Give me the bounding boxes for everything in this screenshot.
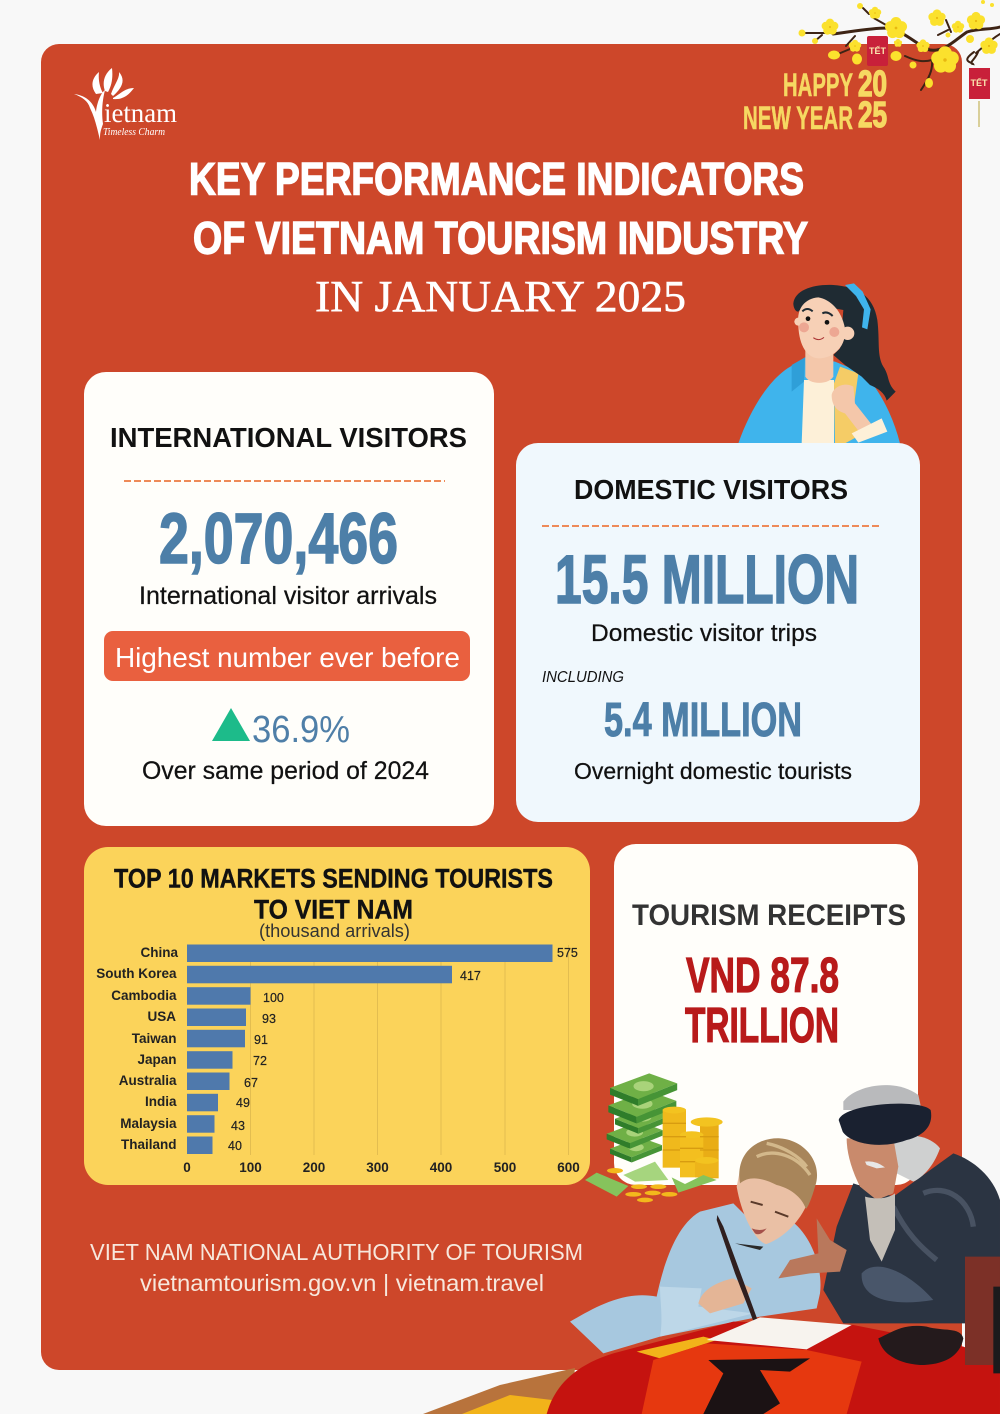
overnight tourists caption: Overnight domestic tourists <box>574 758 852 784</box>
heading: top 10 markets <box>114 864 553 924</box>
bar chart: 40 <box>228 1139 242 1153</box>
heading: international visitors: INTERNATIONAL VISITORS <box>110 422 467 453</box>
bar chart: 600 <box>557 1160 580 1175</box>
receipts figure <box>685 949 839 1053</box>
growth caption: Over same period of 2024 <box>142 757 429 785</box>
bar chart: China <box>140 945 178 960</box>
child <box>570 1138 821 1353</box>
elder <box>823 1085 1000 1323</box>
title: KEY PERFORMANCE INDICATORS <box>189 154 804 204</box>
footer: organisation and websites: VIET NAM NATIONAL AUTHORITY OF TOURISM <box>90 1239 583 1265</box>
bar chart: Taiwan <box>132 1031 176 1046</box>
apricot blossom branch with Tet lanterns <box>798 0 1000 127</box>
heading: top 10 markets: TO VIET NAM <box>254 894 413 924</box>
bar chart: 300 <box>366 1160 389 1175</box>
title <box>189 154 808 321</box>
logo: Vietnam Timeless Charm: ietnam <box>104 98 177 128</box>
bar chart: 500 <box>494 1160 516 1175</box>
badge: highest number ever before <box>104 631 470 681</box>
bar chart: 93 <box>262 1012 276 1026</box>
bar chart: 91 <box>254 1033 268 1047</box>
panel: international visitors <box>84 372 494 826</box>
greeting: Happy New Year 2025: HAPPY <box>783 67 853 103</box>
logo: Vietnam Timeless Charm: Timeless Charm <box>103 127 165 138</box>
bar chart: 575 <box>557 946 578 960</box>
badge: highest number ever before: Highest number ever before <box>115 642 460 673</box>
bar chart: 200 <box>303 1160 325 1175</box>
illustration: stacks of money and coins <box>585 1073 723 1202</box>
bar chart: Thailand <box>121 1137 176 1152</box>
bar chart: South Korea <box>96 966 177 981</box>
bar chart: 100 <box>263 991 284 1005</box>
illustration: rug under table <box>423 1368 575 1414</box>
logo: Vietnam Timeless Charm <box>74 68 177 140</box>
international arrivals caption: International visitor arrivals <box>139 582 437 610</box>
panel: tourism receipts <box>614 844 918 1185</box>
bar chart: 49 <box>236 1096 250 1110</box>
receipts figure: TRILLION <box>685 999 839 1053</box>
bar chart: 417 <box>460 969 481 983</box>
panel: domestic visitors <box>516 443 920 822</box>
greeting: Happy New Year 2025: 20 <box>858 63 887 104</box>
greeting: Happy New Year 2025 <box>743 63 887 136</box>
elder's hand <box>778 1218 847 1278</box>
title: IN JANUARY 2025 <box>315 272 686 321</box>
footer: organisation and websites: vietnamtourism.gov.vn | vietnam.travel <box>140 1270 544 1296</box>
bar chart: 43 <box>231 1119 245 1133</box>
red table <box>547 1317 1000 1414</box>
illustration: elder and child practising calligraphy <box>547 1085 1000 1414</box>
bar chart: India <box>145 1094 177 1109</box>
title: OF VIETNAM TOURISM INDUSTRY <box>193 212 808 264</box>
heading: tourism receipts: TOURISM RECEIPTS <box>632 899 906 932</box>
apricot blossom branch with Tet lanterns: TẾT <box>970 78 988 88</box>
heading: top 10 markets: TOP 10 MARKETS SENDING TOURISTS <box>114 864 553 894</box>
panel: top 10 markets <box>84 847 590 1185</box>
bar chart <box>96 944 580 1175</box>
bar chart: Malaysia <box>120 1116 177 1131</box>
overnight tourists figure: 5.4 MILLION <box>604 694 802 747</box>
bar chart: Australia <box>119 1073 177 1088</box>
growth figure: 36.9% <box>252 709 350 751</box>
apricot blossom branch with Tet lanterns: TẾT <box>869 46 887 56</box>
icon: green up arrow <box>212 708 250 741</box>
bar chart: 100 <box>239 1160 262 1175</box>
bar chart: Japan <box>137 1052 176 1067</box>
including label: INCLUDING <box>542 669 624 686</box>
domestic trips caption: Domestic visitor trips <box>591 620 817 647</box>
domestic trips figure: 15.5 MILLION <box>555 541 859 618</box>
chart subtitle: (thousand arrivals) <box>259 921 410 941</box>
receipts figure: VND 87.8 <box>686 949 839 1003</box>
ink bowl <box>878 1326 963 1365</box>
footer: organisation and websites <box>90 1239 583 1296</box>
international arrivals figure: 2,070,466 <box>159 500 398 579</box>
bar chart: 72 <box>253 1054 267 1068</box>
bar chart: 400 <box>430 1160 452 1175</box>
heading: domestic visitors: DOMESTIC VISITORS <box>574 474 848 505</box>
illustration: young woman traveller <box>738 283 900 443</box>
greeting: Happy New Year 2025: NEW YEAR <box>743 100 853 136</box>
greeting: Happy New Year 2025: 25 <box>858 94 887 135</box>
brush pot <box>965 1257 1000 1373</box>
bar chart: USA <box>147 1009 176 1024</box>
bar chart: 0 <box>183 1160 191 1175</box>
bar chart: Cambodia <box>111 988 177 1003</box>
bar chart: 67 <box>244 1076 258 1090</box>
